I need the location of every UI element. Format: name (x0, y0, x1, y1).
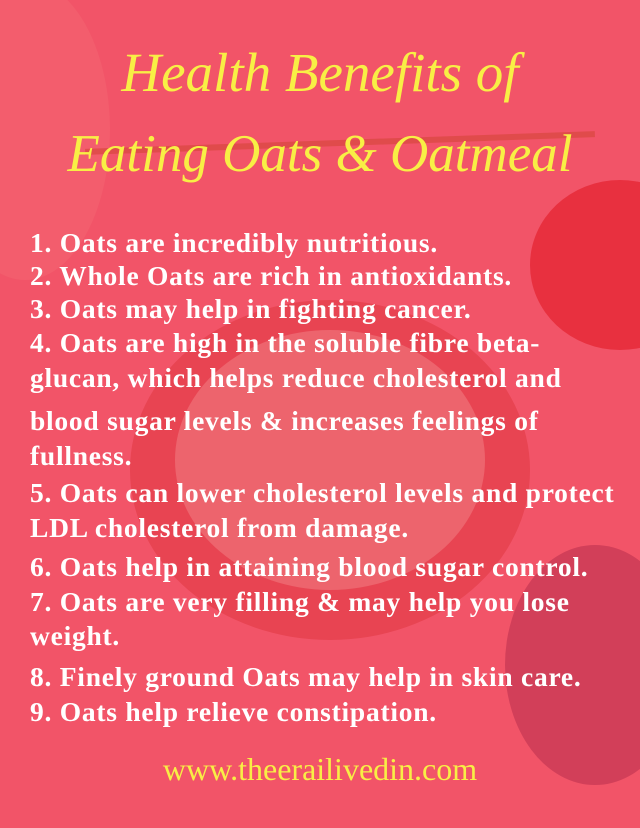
benefits list: 7. Oats are very filling & may help you lose (30, 586, 570, 617)
background: red bowl (130, 300, 530, 640)
benefits list: 5. Oats can lower cholesterol levels and protect (30, 477, 614, 508)
benefits list: 1. Oats are incredibly nutritious. (30, 227, 438, 258)
title (66, 42, 572, 183)
benefits list (30, 227, 614, 727)
benefits list: LDL cholesterol from damage. (30, 512, 409, 543)
benefits list: glucan, which helps reduce cholesterol and (30, 362, 562, 393)
benefits list: 4. Oats are high in the soluble fibre beta- (30, 327, 540, 358)
background: raspberries bowl (530, 180, 640, 350)
benefits list: 9. Oats help relieve constipation. (30, 696, 437, 727)
background: blueberries bowl (505, 545, 640, 785)
benefits list: blood sugar levels & increases feelings of (30, 405, 539, 436)
benefits list: 3. Oats may help in fighting cancer. (30, 293, 472, 324)
benefits list: 6. Oats help in attaining blood sugar control. (30, 551, 588, 582)
benefits list: fullness. (30, 440, 132, 471)
benefits list: 2. Whole Oats are rich in antioxidants. (30, 260, 512, 291)
website url: www.theerailivedin.com (163, 751, 477, 787)
title: Health Benefits of (121, 42, 519, 103)
background: plate shape left (0, 0, 110, 280)
benefits list: 8. Finely ground Oats may help in skin care. (30, 661, 582, 692)
background: oats in bowl (175, 330, 485, 590)
benefits list: weight. (30, 620, 120, 651)
background: herb stem (85, 131, 595, 155)
title: Eating Oats & Oatmeal (68, 125, 572, 183)
